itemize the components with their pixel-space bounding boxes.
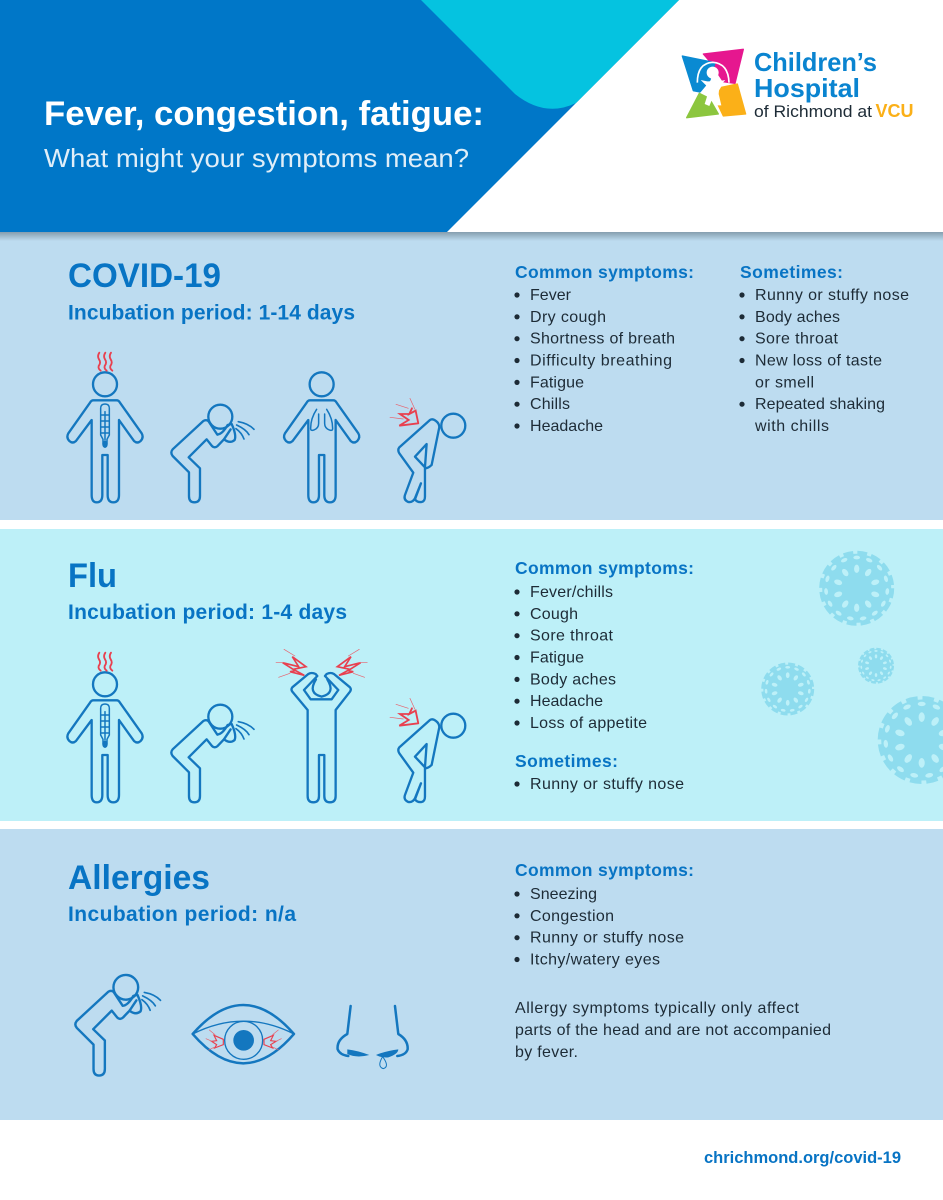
common symptoms list: Dry cough — [530, 309, 606, 326]
title: Fever, congestion, fatigue: — [44, 95, 484, 133]
allergy note — [515, 1000, 831, 1061]
allergy note: parts of the head and are not accompanied — [515, 1022, 831, 1039]
sometimes list: Runny or stuffy nose — [530, 776, 684, 793]
header shadow — [0, 232, 943, 241]
heading: Flu — [68, 557, 117, 595]
common symptoms list: Runny or stuffy nose — [530, 930, 684, 947]
common symptoms list: Common symptoms: — [515, 262, 694, 282]
panel: Flu — [0, 529, 943, 821]
sometimes list: Sometimes: — [515, 751, 618, 771]
sometimes list: with chills — [754, 418, 829, 435]
icon: sneezing person — [75, 975, 160, 1076]
common symptoms list — [514, 558, 694, 732]
incubation period: Incubation period: 1-14 days — [68, 302, 355, 324]
allergy note: by fever. — [515, 1044, 578, 1061]
sometimes list: Repeated shaking — [755, 396, 885, 413]
logo mark — [682, 49, 746, 118]
common symptoms list: Sneezing — [530, 886, 597, 903]
panel: COVID-19 — [0, 232, 943, 520]
sometimes list — [739, 262, 909, 435]
common symptoms list: Shortness of breath — [530, 331, 675, 348]
common symptoms list: Headache — [530, 693, 603, 710]
logo: Hospital — [754, 73, 860, 103]
allergy note: Allergy symptoms typically only affect — [515, 1000, 800, 1017]
icon: lungs person — [284, 372, 359, 502]
header banner — [0, 0, 679, 232]
header cyan shape — [421, 0, 679, 109]
incubation period: Incubation period: 1-4 days — [68, 601, 347, 624]
common symptoms list: Congestion — [530, 908, 614, 925]
sometimes list: or smell — [755, 374, 814, 391]
icon: fever person — [67, 353, 143, 502]
panel background — [0, 529, 943, 821]
common symptoms list: Sore throat — [530, 628, 614, 645]
sometimes list: New loss of taste — [755, 352, 882, 370]
icon: coughing person — [171, 705, 254, 802]
sometimes list: Runny or stuffy nose — [755, 287, 909, 304]
common symptoms list: Loss of appetite — [530, 715, 647, 732]
incubation period: Incubation period: n/a — [68, 903, 296, 926]
common symptoms list: Body aches — [530, 671, 616, 688]
common symptoms list — [514, 262, 694, 435]
common symptoms list: Cough — [530, 606, 578, 623]
icon: coughing person — [171, 405, 254, 502]
sometimes list: Sore throat — [755, 331, 839, 348]
heading: Allergies — [68, 859, 210, 897]
panel background — [0, 232, 943, 520]
subtitle: What might your symptoms mean? — [44, 143, 469, 173]
logo — [682, 47, 914, 121]
common symptoms list: Fever/chills — [530, 584, 613, 601]
icon: itchy eye — [193, 1005, 294, 1063]
common symptoms list: Itchy/watery eyes — [530, 952, 660, 968]
virus illustrations — [763, 553, 943, 781]
logo wordmark: Children’s — [754, 47, 877, 77]
common symptoms list: Fever — [530, 287, 572, 304]
common symptoms list: Fatigue — [530, 374, 584, 391]
icon: runny nose — [338, 1006, 408, 1069]
logo: of Richmond at — [754, 102, 872, 121]
icon: body aches person — [276, 649, 367, 802]
sometimes list: Body aches — [755, 309, 840, 326]
icon: back ache person — [390, 398, 465, 502]
logo: VCU — [876, 101, 914, 121]
heading: COVID-19 — [68, 257, 221, 295]
icon: back ache person — [390, 698, 465, 802]
common symptoms list — [514, 860, 694, 968]
common symptoms list: Headache — [530, 418, 603, 435]
footer url: chrichmond.org/covid-19 — [704, 1149, 901, 1167]
common symptoms list: Common symptoms: — [515, 860, 694, 880]
sometimes list: Sometimes: — [740, 262, 843, 282]
panel background — [0, 829, 943, 1120]
common symptoms list: Fatigue — [530, 650, 584, 666]
common symptoms list: Chills — [530, 396, 570, 413]
common symptoms list: Common symptoms: — [515, 558, 694, 578]
icon: fever person — [67, 653, 143, 802]
sometimes list — [514, 751, 684, 793]
common symptoms list: Difficulty breathing — [530, 352, 672, 370]
header blue shape — [0, 0, 679, 232]
panel: Allergies — [0, 829, 943, 1120]
